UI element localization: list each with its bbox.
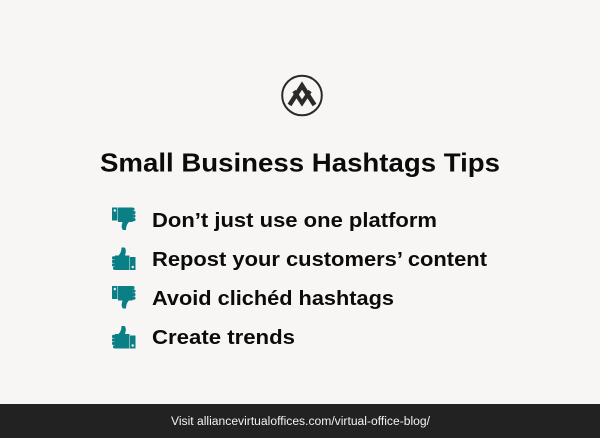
tips list <box>112 208 487 349</box>
tip 2: thumbs up icon <box>112 248 136 270</box>
tip 4: thumbs up icon <box>112 326 136 348</box>
tip 4 text: Create trends <box>152 326 295 349</box>
tip 3 text: Avoid clichéd hashtags <box>152 287 394 310</box>
footer text: Visit alliancevirtualoffices.com/virtual-office-blog/ <box>171 416 431 428</box>
tip 3: thumbs down icon <box>112 286 136 308</box>
logo <box>282 76 322 115</box>
footer bar <box>0 404 600 438</box>
tip 2 text: Repost your customers’ content <box>152 248 487 271</box>
title: Small Business Hashtags Tips <box>100 148 500 178</box>
tip 1: thumbs down icon <box>112 208 136 230</box>
tip 1 text: Don’t just use one platform <box>152 209 437 232</box>
